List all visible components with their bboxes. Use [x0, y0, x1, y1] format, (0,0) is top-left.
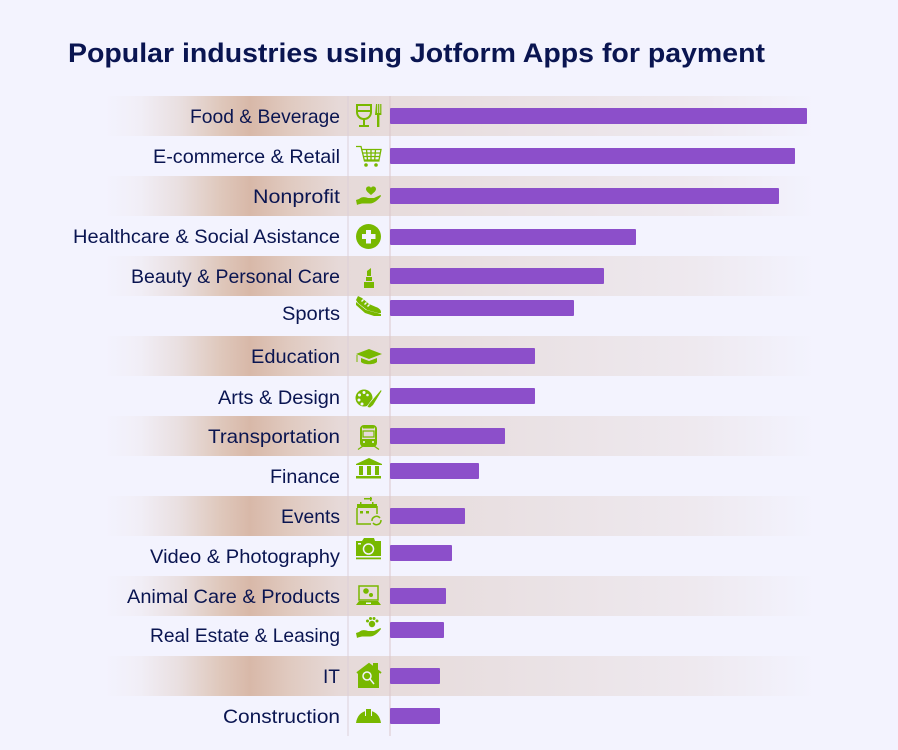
category labels: Arts & Design [218, 387, 340, 409]
category labels: Real Estate & Leasing [150, 625, 340, 647]
category labels: Finance [270, 466, 340, 488]
icon: house with magnifier [357, 663, 381, 688]
icon: events calendar [357, 497, 381, 525]
icon: lipstick [364, 268, 374, 288]
category labels: Nonprofit [253, 186, 341, 208]
category labels [73, 106, 341, 728]
title: Popular industries using Jotform Apps for payment [68, 38, 765, 68]
category labels: Video & Photography [150, 546, 340, 568]
category labels: Education [251, 346, 340, 368]
icon: food and beverage [357, 104, 381, 127]
icon: hand holding paw [356, 617, 381, 638]
category labels: Sports [282, 303, 340, 325]
category labels: Transportation [208, 426, 340, 448]
alternating row bands [105, 96, 815, 696]
icon: bank building [356, 458, 382, 478]
icon: sports shoe [356, 296, 381, 316]
category labels: Animal Care & Products [127, 586, 340, 608]
category labels: Construction [223, 706, 340, 728]
icon: camera [356, 538, 381, 559]
category labels: Healthcare & Social Asistance [73, 226, 340, 248]
category labels: IT [323, 666, 340, 688]
category labels: E-commerce & Retail [153, 146, 340, 168]
category labels: Events [281, 506, 340, 528]
category labels: Beauty & Personal Care [131, 266, 340, 288]
icon: graduation cap [356, 349, 382, 364]
icon: hand holding heart [356, 186, 381, 205]
icon: hard hat [356, 709, 381, 723]
icon: shopping cart [356, 146, 381, 167]
icon: healthcare cross [356, 224, 381, 249]
icon: palette and brush [356, 390, 382, 408]
category labels: Food & Beverage [190, 106, 340, 128]
icon: train [358, 426, 379, 450]
icon: laptop with gears [356, 586, 381, 605]
bar chart [390, 108, 807, 724]
